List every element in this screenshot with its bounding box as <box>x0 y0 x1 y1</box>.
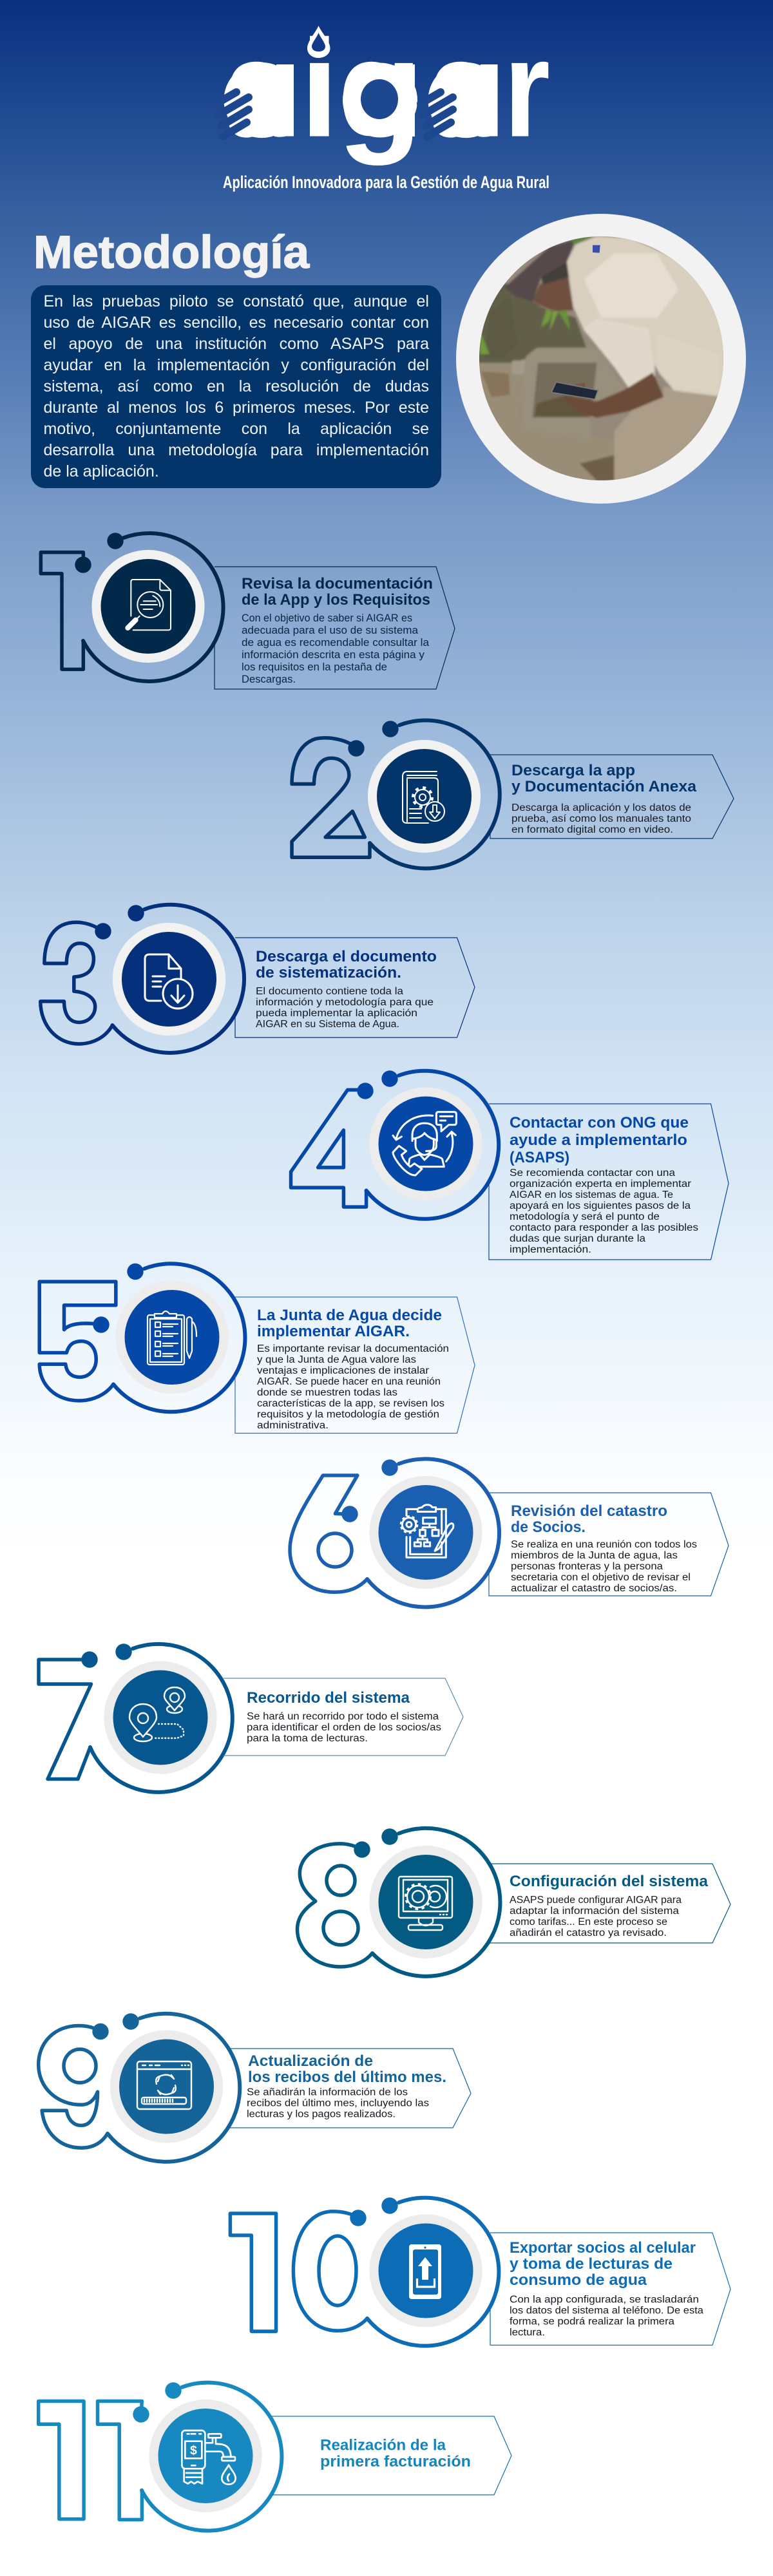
callout arrow box <box>489 1493 729 1596</box>
step 9 body text: recibos del último mes, incluyendo las <box>247 2098 429 2108</box>
intro text panel: En las pruebas piloto se constató que, aunque el <box>44 292 429 310</box>
intro text panel: durante al menos los 6 primeros meses. Por este <box>44 399 429 417</box>
callout arrow box <box>235 1297 475 1434</box>
step 9 body text <box>247 2087 429 2120</box>
icon: clipboard with gear and flowchart <box>369 1476 482 1589</box>
logo: AIGAR: a <box>224 10 289 166</box>
callout arrow box <box>490 2233 730 2345</box>
step 9 heading: Actualización de <box>248 2052 373 2070</box>
step 5 body text: donde se muestren todas las <box>257 1387 397 1398</box>
step 7 body text: para la toma de lecturas. <box>247 1733 368 1744</box>
step 6 body text: secretaria con el objetivo de revisar el <box>511 1572 691 1583</box>
callout arrow box <box>490 755 734 838</box>
step 5 body text: requisitos y la metodología de gestión <box>257 1409 439 1420</box>
step 5 body text: ventajas e implicaciones de instalar <box>257 1365 429 1376</box>
icon: route between map pins <box>104 1661 217 1774</box>
step 1 body text: de agua es recomendable consultar la <box>242 637 430 649</box>
step 4 body text: AIGAR en los sistemas de agua. Te <box>510 1189 673 1200</box>
step 9 heading: los recibos del último mes. <box>248 2069 446 2086</box>
callout arrow box <box>235 938 475 1037</box>
panel: step 7 <box>39 1643 463 1792</box>
step 2 heading: Descarga la app <box>511 762 635 779</box>
step 6 body text: actualizar el catastro de socios/as. <box>511 1583 677 1594</box>
step 10 heading <box>510 2239 696 2289</box>
step 10 heading: consumo de agua <box>510 2271 647 2289</box>
step 4 body text: metodología y será el punto de <box>510 1211 660 1222</box>
step 10 body text: los datos del sistema al teléfono. De esta <box>510 2306 703 2316</box>
step 5 body text: administrativa. <box>257 1420 329 1431</box>
step 4 heading <box>510 1114 689 1166</box>
number 9 outline with orbit <box>39 2013 240 2162</box>
panel: step 2 <box>292 721 734 869</box>
step 7 body text: para identificar el orden de los socios/as <box>247 1722 441 1733</box>
panel: step 9 <box>39 2013 471 2162</box>
step 4 body text: contacto para responder a las posibles <box>510 1222 698 1233</box>
step 11 heading: Realización de la <box>320 2437 446 2454</box>
step 1 body text: información descrita en esta página y <box>242 649 425 661</box>
panel: step 1 <box>41 533 455 689</box>
step 4 body text: dudas que surjan durante la <box>510 1233 645 1244</box>
logo: AIGAR: i <box>300 10 339 166</box>
icon: document download <box>113 923 225 1036</box>
step 3 body text: AIGAR en su Sistema de Agua. <box>256 1019 399 1030</box>
logo: AIGAR: r <box>504 10 550 166</box>
callout arrow box <box>272 2416 511 2495</box>
step 2 body text <box>511 802 691 835</box>
number 4 outline with orbit <box>291 1070 499 1219</box>
panel: step 3 <box>41 905 475 1053</box>
step 6 body text: personas fronteras y la persona <box>511 1561 663 1572</box>
step 5 body text: Es importante revisar la documentación <box>257 1343 449 1354</box>
step 6 body text <box>511 1539 697 1594</box>
step 5 heading: La Junta de Agua decide <box>257 1307 442 1324</box>
intro text panel: ayudar en la implementación y configuración del <box>44 356 429 374</box>
number 11 outline with orbit <box>39 2382 282 2531</box>
step 4 body text: implementación. <box>510 1244 591 1255</box>
step 4 heading: (ASAPS) <box>510 1149 569 1166</box>
panel: step 4 <box>291 1070 729 1260</box>
number 3 outline with orbit <box>41 905 244 1053</box>
step 11 heading: primera facturación <box>320 2453 471 2470</box>
intro text panel: de la aplicación. <box>44 462 159 480</box>
panel: step 8 <box>297 1828 730 1976</box>
number 7 outline with orbit <box>39 1643 233 1792</box>
step 10 body text <box>510 2294 703 2338</box>
step 4 body text <box>510 1168 698 1255</box>
callout arrow box <box>489 1104 729 1260</box>
number 8 outline with orbit <box>297 1828 500 1976</box>
intro text panel <box>31 285 441 488</box>
logo: AIGAR: a <box>428 10 493 166</box>
icon: document with magnifier <box>91 550 205 663</box>
panel: step 5 <box>39 1264 475 1434</box>
icon: manual with gear and download <box>368 740 481 853</box>
step 3 body text: pueda implementar la aplicación <box>256 1008 417 1019</box>
subtitle: Aplicación Innovadora para la Gestión de Agua Rural <box>223 173 549 192</box>
step 10 body text: Con la app configurada, se trasladarán <box>510 2294 699 2306</box>
step 6 body text: Se realiza en una reunión con todos los <box>511 1539 697 1550</box>
step 1 body text: adecuada para el uso de su sistema <box>242 625 419 636</box>
step 4 body text: Se recomienda contactar con una <box>510 1168 675 1179</box>
step 3 body text: información y metodología para que <box>256 997 434 1008</box>
step 8 heading: Configuración del sistema <box>510 1873 708 1890</box>
step 3 heading <box>256 948 437 981</box>
step 4 body text: organización experta en implementar <box>510 1179 691 1189</box>
icon: monitor with gears <box>369 1846 482 1958</box>
icon: smartphone upload <box>369 2214 482 2327</box>
step 7 body text <box>247 1711 441 1744</box>
step 2 heading <box>511 762 696 795</box>
step 5 body text: AIGAR. Se puede hacer en una reunión <box>257 1376 441 1387</box>
step 1 body text: los requisitos en la pestaña de <box>242 661 387 673</box>
step 1 body text: Descargas. <box>242 674 296 685</box>
step 8 body text <box>510 1895 682 1938</box>
step 1 heading: de la App y los Requisitos <box>242 591 430 609</box>
step 4 body text: apoyará en los siguientes pasos de la <box>510 1200 691 1211</box>
step 5 body text: características de la app, se revisen los <box>257 1398 444 1409</box>
step 1 body text: Con el objetivo de saber si AIGAR es <box>242 612 412 624</box>
step 5 heading: implementar AIGAR. <box>257 1323 410 1340</box>
number 2 outline with orbit <box>292 721 500 869</box>
step 1 heading <box>242 575 433 609</box>
icon: call-centre agent <box>369 1087 482 1200</box>
step 6 heading: de Socios. <box>511 1519 586 1536</box>
step 5 body text <box>257 1343 449 1431</box>
step 5 heading <box>257 1307 442 1340</box>
step 6 heading <box>511 1502 667 1536</box>
number 10 outline with orbit <box>230 2197 499 2346</box>
step 2 body text: en formato digital como en video. <box>511 824 673 835</box>
panel: step 10 <box>230 2197 730 2346</box>
step 7 heading: Recorrido del sistema <box>247 1689 410 1707</box>
intro text panel: motivo, conjuntamente con la aplicación se <box>44 420 429 438</box>
icon: phone payment with tap and water drop <box>149 2400 262 2512</box>
number 1 outline with orbit <box>41 533 224 681</box>
intro text panel: uso de AIGAR es sencillo, es necesario contar con <box>44 314 429 332</box>
step 10 heading: y toma de lecturas de <box>510 2255 673 2273</box>
step 9 body text: Se añadirán la información de los <box>247 2087 408 2098</box>
step 10 heading: Exportar socios al celular <box>510 2239 696 2257</box>
intro text panel: desarrolla una metodología para implementación <box>44 441 429 459</box>
step 6 heading: Revisión del catastro <box>511 1502 667 1520</box>
step 9 heading <box>248 2052 446 2086</box>
step 10 body text: lectura. <box>510 2327 545 2338</box>
panel: step 6 <box>290 1459 729 1607</box>
photo: man using phone at water meter <box>456 214 746 504</box>
icon: browser window with refresh and progress bar <box>110 2030 223 2143</box>
intro text panel: sistema, así como en la resolución de dudas <box>44 377 429 395</box>
step 3 body text: El documento contiene toda la <box>256 986 403 997</box>
step 8 body text: como tarifas... En este proceso se <box>510 1917 667 1927</box>
number 6 outline with orbit <box>290 1459 499 1607</box>
step 9 body text: lecturas y los pagos realizados. <box>247 2108 396 2120</box>
callout arrow box <box>230 2049 471 2128</box>
intro text panel: el apoyo de una institución como ASAPS para <box>44 335 429 353</box>
step 1 heading: Revisa la documentación <box>242 575 433 592</box>
step 7 body text: Se hará un recorrido por todo el sistema <box>247 1711 439 1722</box>
step 5 body text: y que la Junta de Agua valore las <box>257 1354 416 1365</box>
panel: step 11 <box>39 2382 511 2531</box>
step 6 body text: miembros de la Junta de agua, las <box>511 1550 678 1561</box>
step 11 heading <box>320 2437 471 2470</box>
icon: phone payment with tap and water drop: $ <box>190 2444 197 2458</box>
callout arrow box <box>215 567 455 689</box>
logo: AIGAR: g <box>338 10 422 166</box>
step 2 heading: y Documentación Anexa <box>511 778 696 795</box>
step 3 heading: de sistematización. <box>256 964 401 981</box>
step 8 body text: ASAPS puede configurar AIGAR para <box>510 1895 682 1906</box>
logo: AIGAR <box>216 10 550 166</box>
heading: Metodología: Metodología <box>33 227 310 278</box>
callout arrow box <box>489 1864 730 1943</box>
step 2 body text: prueba, así como los manuales tanto <box>511 813 691 824</box>
step 8 body text: añadirán el catastro ya revisado. <box>510 1927 667 1938</box>
icon: clipboard checklist <box>115 1281 229 1394</box>
step 3 heading: Descarga el documento <box>256 948 437 965</box>
step 10 body text: forma, se podrá realizar la primera <box>510 2316 674 2327</box>
number 5 outline with orbit <box>39 1264 245 1412</box>
step 2 body text: Descarga la aplicación y los datos de <box>511 802 691 813</box>
step 8 body text: adaptar la información del sistema <box>510 1906 679 1917</box>
step 3 body text <box>256 986 434 1030</box>
step 4 heading: ayude a implementarlo <box>510 1132 687 1149</box>
step 1 body text <box>242 612 430 685</box>
callout arrow box <box>224 1678 463 1756</box>
step 4 heading: Contactar con ONG que <box>510 1114 689 1132</box>
